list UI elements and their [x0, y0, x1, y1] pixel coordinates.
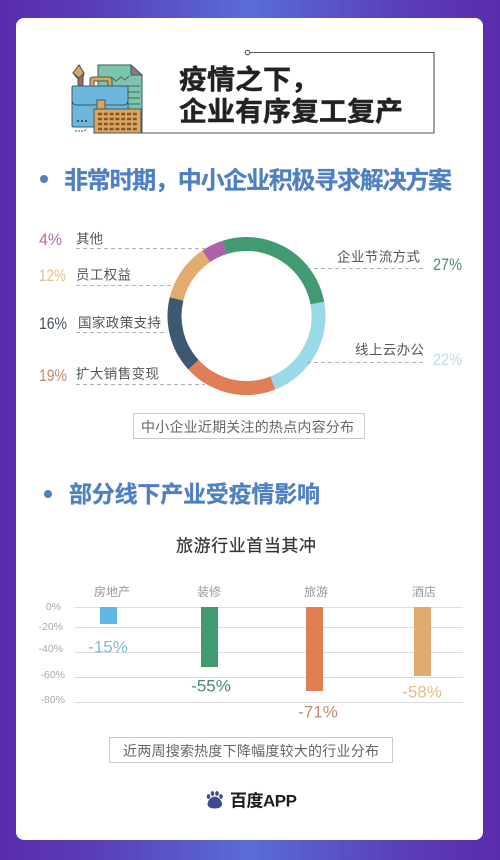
donut labels: 扩大销售变现 [76, 366, 159, 382]
donut labels: 27% [433, 256, 462, 274]
caption: bar chart [110, 738, 392, 762]
donut labels: 其他 [76, 232, 103, 246]
chart subtitle: 旅游行业首当其冲 [176, 536, 316, 556]
section heading: 线下产业: 部分线下产业受疫情影响 [69, 481, 320, 507]
bar chart: -80% [40, 694, 65, 706]
icon: briefcase, document and keyboard [72, 65, 142, 133]
bar chart: -71% [298, 702, 338, 722]
bar chart: -58% [402, 682, 442, 702]
bar chart [38, 584, 463, 722]
title: 企业有序复工复产 [179, 97, 403, 127]
bar chart: -15% [88, 638, 128, 656]
donut labels: 线上云办公 [355, 342, 424, 358]
title frame [140, 50, 434, 133]
donut leader lines [76, 248, 423, 384]
donut labels: 16% [39, 315, 67, 333]
icon: Baidu paw logo [207, 791, 223, 808]
bar chart: 装修 [197, 584, 221, 599]
donut labels: 企业节流方式 [337, 248, 420, 264]
caption: donut chart [134, 414, 364, 438]
bar chart: 房地产 [94, 584, 130, 599]
donut labels: 4% [39, 231, 62, 249]
bar chart: -55% [191, 676, 231, 696]
bar chart: 旅游 [304, 585, 328, 599]
brand name: 百度APP [230, 792, 297, 810]
donut labels: 19% [39, 367, 67, 385]
bar chart: -60% [40, 669, 65, 681]
caption: bar chart: 近两周搜索热度下降幅度较大的行业分布 [123, 743, 379, 759]
donut labels: 12% [39, 267, 66, 285]
bar chart: -20% [38, 621, 63, 633]
donut labels: 员工权益 [76, 266, 131, 282]
donut labels: 22% [433, 351, 462, 369]
section heading: 非常时期: 非常时期，中小企业积极寻求解决方案 [64, 166, 452, 194]
donut chart [145, 214, 348, 418]
title: 疫情之下， [179, 65, 319, 95]
donut labels [39, 231, 462, 385]
donut labels: 国家政策支持 [78, 314, 161, 330]
caption: donut chart: 中小企业近期关注的热点内容分布 [141, 419, 354, 435]
title [179, 65, 403, 127]
bar chart: 0% [46, 601, 61, 613]
bar chart: 酒店 [412, 585, 436, 599]
bar chart: -40% [38, 643, 63, 655]
